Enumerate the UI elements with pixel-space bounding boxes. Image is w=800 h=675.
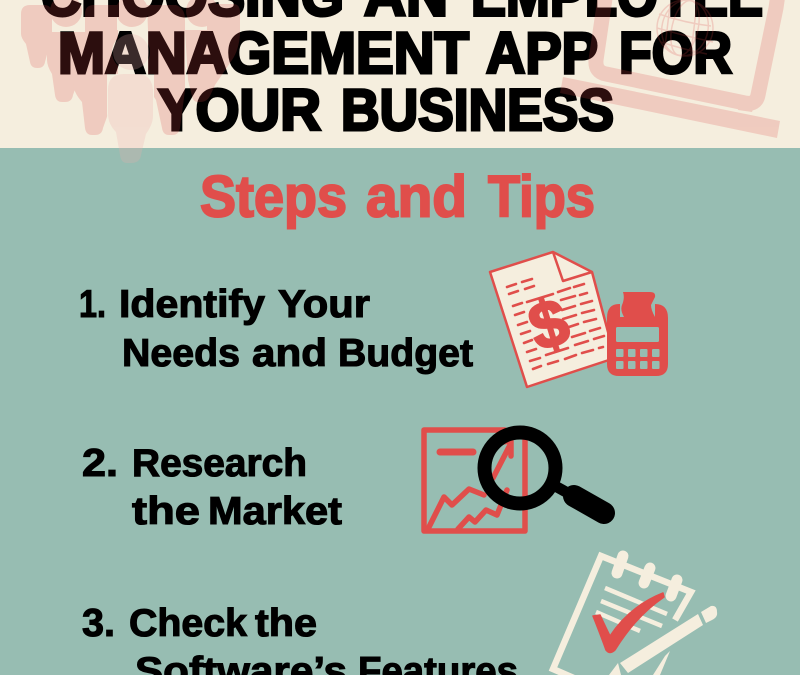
icon: front employee silhouette: [108, 34, 153, 163]
title: [41, 0, 763, 143]
icon: calculator: [607, 292, 668, 376]
step 1 text: 1.: [79, 283, 106, 326]
icon: employee silhouettes: [21, 0, 240, 135]
icon: magnifying glass: [484, 432, 604, 513]
step 3 text: [82, 602, 518, 675]
body background: [0, 148, 800, 675]
step 2 text: 2.: [82, 442, 118, 485]
step 2 text: Market: [208, 490, 342, 533]
title: APP: [486, 21, 598, 86]
header band: [0, 0, 800, 148]
icon: laptop with globe: [560, 0, 780, 138]
step 1 text: Budget: [338, 332, 473, 375]
step 3 text: Check: [129, 602, 247, 645]
subheading: [200, 164, 595, 230]
step 1 text: [79, 283, 473, 375]
step 1 text: and: [252, 332, 327, 375]
step 3 text: 3.: [82, 602, 115, 645]
title: BUSINESS: [341, 78, 614, 143]
step 1 text: Identify: [119, 283, 265, 326]
subheading: Steps: [200, 164, 347, 230]
title: YOUR: [158, 78, 321, 143]
icon: invoice document: [490, 252, 615, 387]
icon: invoice document: $: [520, 283, 577, 365]
icon: market chart: [424, 430, 525, 531]
subheading: Tips: [488, 164, 595, 230]
step 2 text: Research: [132, 442, 307, 485]
step 3 text: the: [255, 602, 317, 645]
icon: pencil: [609, 606, 717, 675]
title: MANAGEMENT: [58, 21, 469, 86]
step 2 text: the: [132, 490, 200, 533]
step 1 text: Your: [278, 283, 370, 326]
step 1 text: Needs: [122, 332, 240, 375]
title: FOR: [619, 21, 732, 86]
step 2 text: [82, 442, 342, 533]
subheading: and: [366, 164, 467, 230]
icon: notepad checklist: [553, 556, 691, 675]
